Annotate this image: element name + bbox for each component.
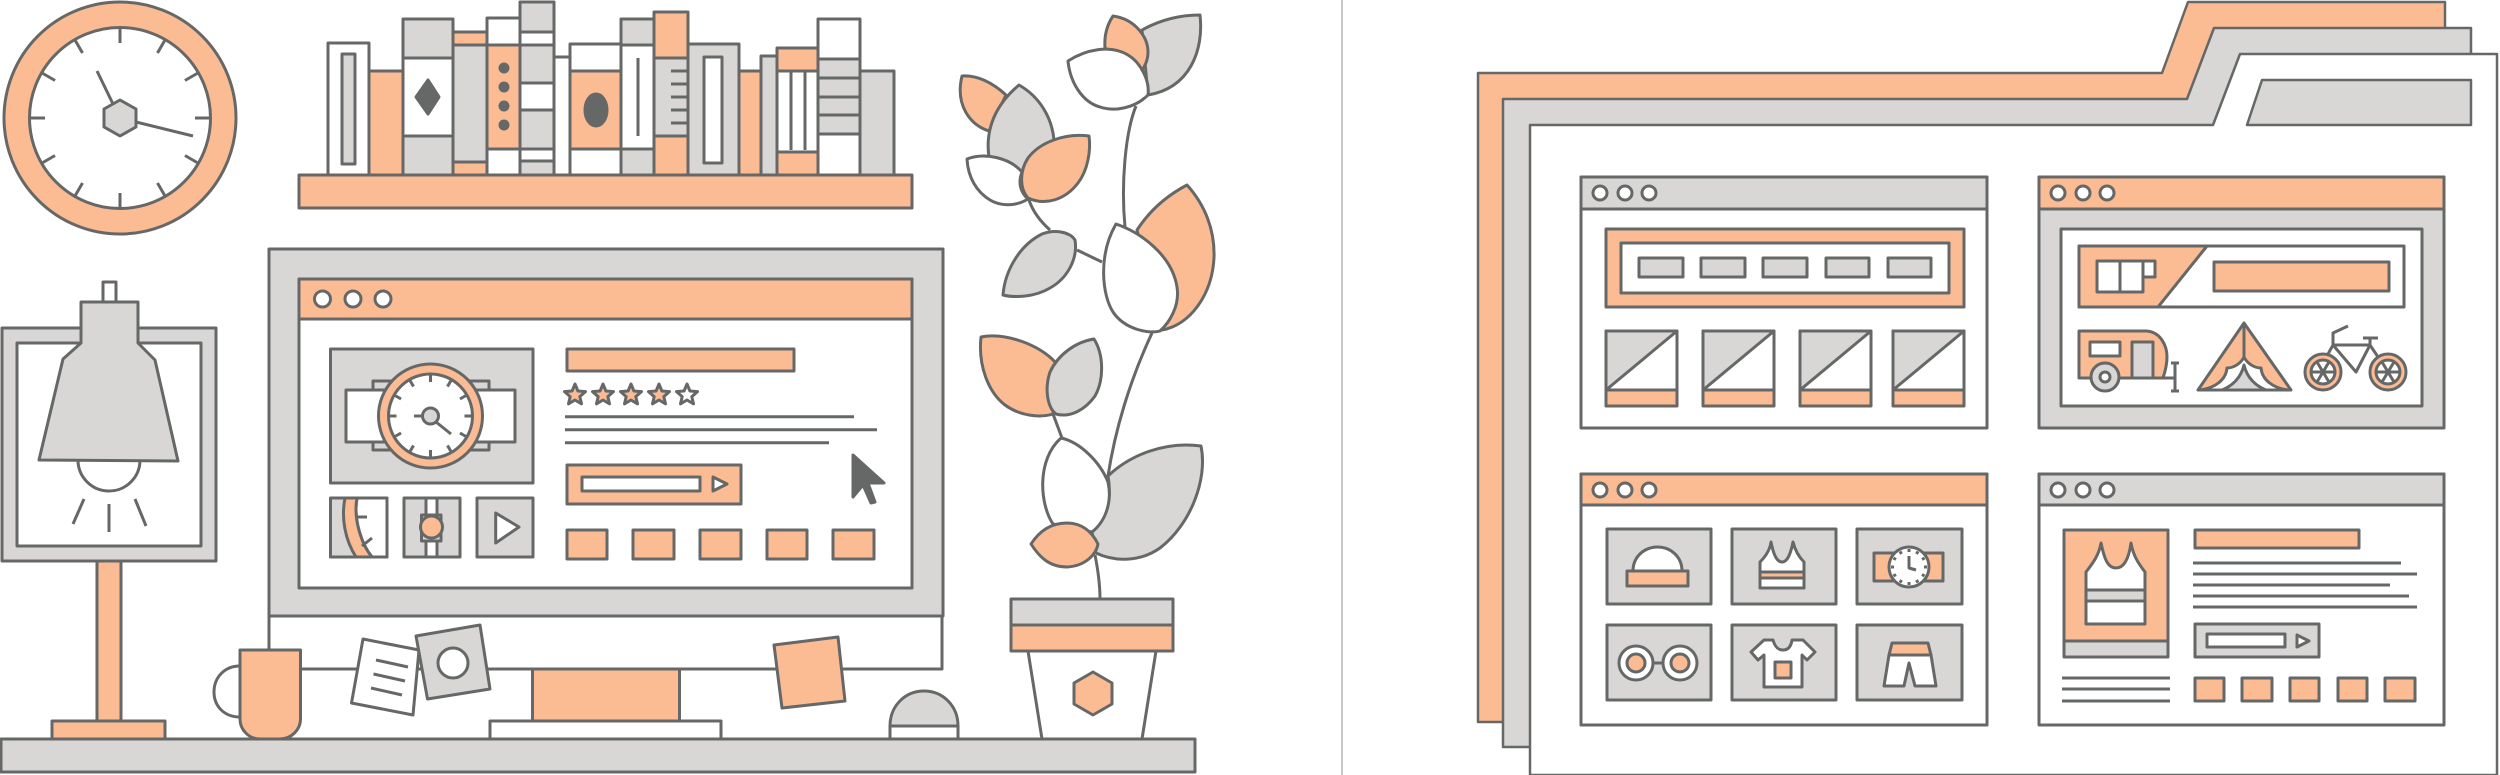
leaves: left cluster — [960, 76, 1090, 205]
vertical divider — [1341, 0, 1343, 775]
icon: bicycle — [2305, 326, 2406, 390]
potted plant — [960, 15, 1214, 739]
hero banner — [2079, 246, 2404, 307]
stems — [1029, 106, 1152, 599]
desk top — [1, 739, 1195, 772]
tile: hat — [1607, 529, 1711, 604]
leaf: grey middle — [1003, 232, 1076, 297]
window: clothing grid — [1581, 474, 1987, 725]
product image: tank top — [2064, 530, 2168, 657]
wall clock — [4, 2, 236, 234]
flower pot — [1011, 599, 1173, 739]
leaves: top cluster — [1068, 15, 1201, 109]
orange sticky note — [774, 637, 845, 708]
sticky note with lines — [352, 639, 419, 715]
window: product detail — [2039, 474, 2444, 725]
leaves: lower left pair — [980, 336, 1102, 416]
folder label — [2247, 80, 2471, 125]
leaves: bottom cluster — [1031, 438, 1203, 567]
title bar — [2195, 530, 2359, 548]
description lines — [2193, 563, 2417, 607]
buy button — [2195, 624, 2319, 657]
product title bar — [567, 349, 794, 371]
icon: camper trailer — [2079, 331, 2179, 391]
caption lines — [2062, 678, 2170, 701]
window: outdoor travel — [2039, 177, 2444, 428]
thumbnail: watch detail — [330, 498, 387, 557]
thumbnail: video play — [477, 498, 533, 557]
tile: tank top — [1732, 529, 1836, 604]
window: banner and product tiles — [1581, 177, 1987, 428]
navigation banner — [1606, 229, 1964, 307]
buy button — [567, 465, 741, 504]
thumbnail: watch front — [404, 498, 460, 557]
coffee mug — [214, 650, 300, 739]
dome paperweight — [890, 691, 958, 739]
cursor arrow — [853, 455, 884, 503]
option squares — [567, 530, 874, 559]
browser window on monitor — [299, 279, 912, 588]
option squares — [2195, 678, 2415, 701]
tile: shorts — [1857, 625, 1962, 700]
leaves: large right pair — [1104, 185, 1214, 332]
sticky note with circle — [416, 625, 490, 699]
table lamp — [2, 282, 216, 739]
desktop monitor — [269, 249, 943, 739]
tile: wristwatch — [1857, 529, 1962, 604]
description lines — [565, 417, 877, 443]
tile: t-shirt — [1732, 625, 1836, 700]
folder stack — [1478, 2, 2497, 775]
tile: sunglasses — [1607, 625, 1711, 700]
icon: tent — [2198, 323, 2291, 390]
tile row — [1606, 331, 1964, 406]
bookshelf with books — [299, 2, 912, 208]
star rating — [564, 384, 698, 404]
product image: watch — [330, 349, 533, 483]
